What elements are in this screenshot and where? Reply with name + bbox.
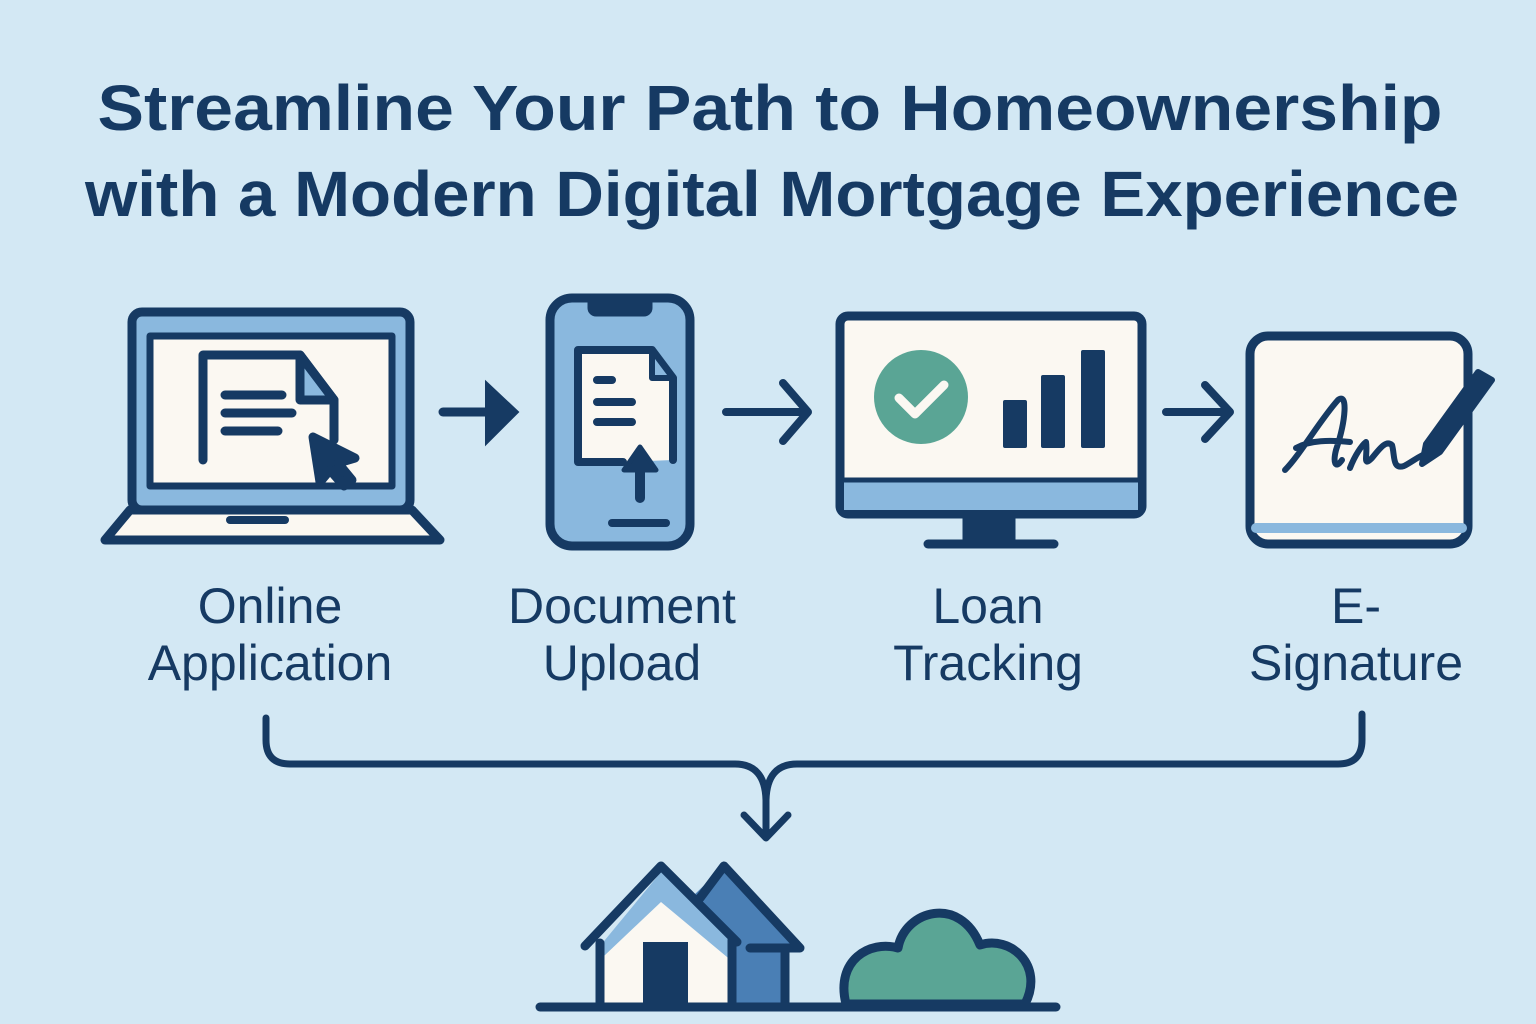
labels: Loan: [932, 578, 1044, 634]
labels: [148, 578, 1463, 691]
title: [84, 72, 1459, 230]
arrow 3: [1166, 385, 1230, 439]
icon: houses and bush: [540, 866, 1056, 1007]
icon: tablet with signature: [1250, 336, 1492, 544]
labels: Upload: [543, 635, 701, 691]
labels: Online: [198, 578, 342, 634]
labels: Signature: [1249, 635, 1463, 691]
icon: monitor: [840, 316, 1142, 544]
arrow 2: [726, 383, 808, 441]
labels: Document: [508, 578, 736, 634]
title: Streamline Your Path to Homeownership: [98, 72, 1442, 144]
icon: laptop: [105, 312, 440, 540]
arrow 1: [443, 382, 518, 444]
bracket arrow: [266, 714, 1362, 838]
labels: Application: [148, 635, 392, 691]
icon: phone: [550, 298, 690, 546]
labels: Tracking: [893, 635, 1083, 691]
title: with a Modern Digital Mortgage Experience: [84, 158, 1459, 230]
labels: E-: [1331, 578, 1381, 634]
